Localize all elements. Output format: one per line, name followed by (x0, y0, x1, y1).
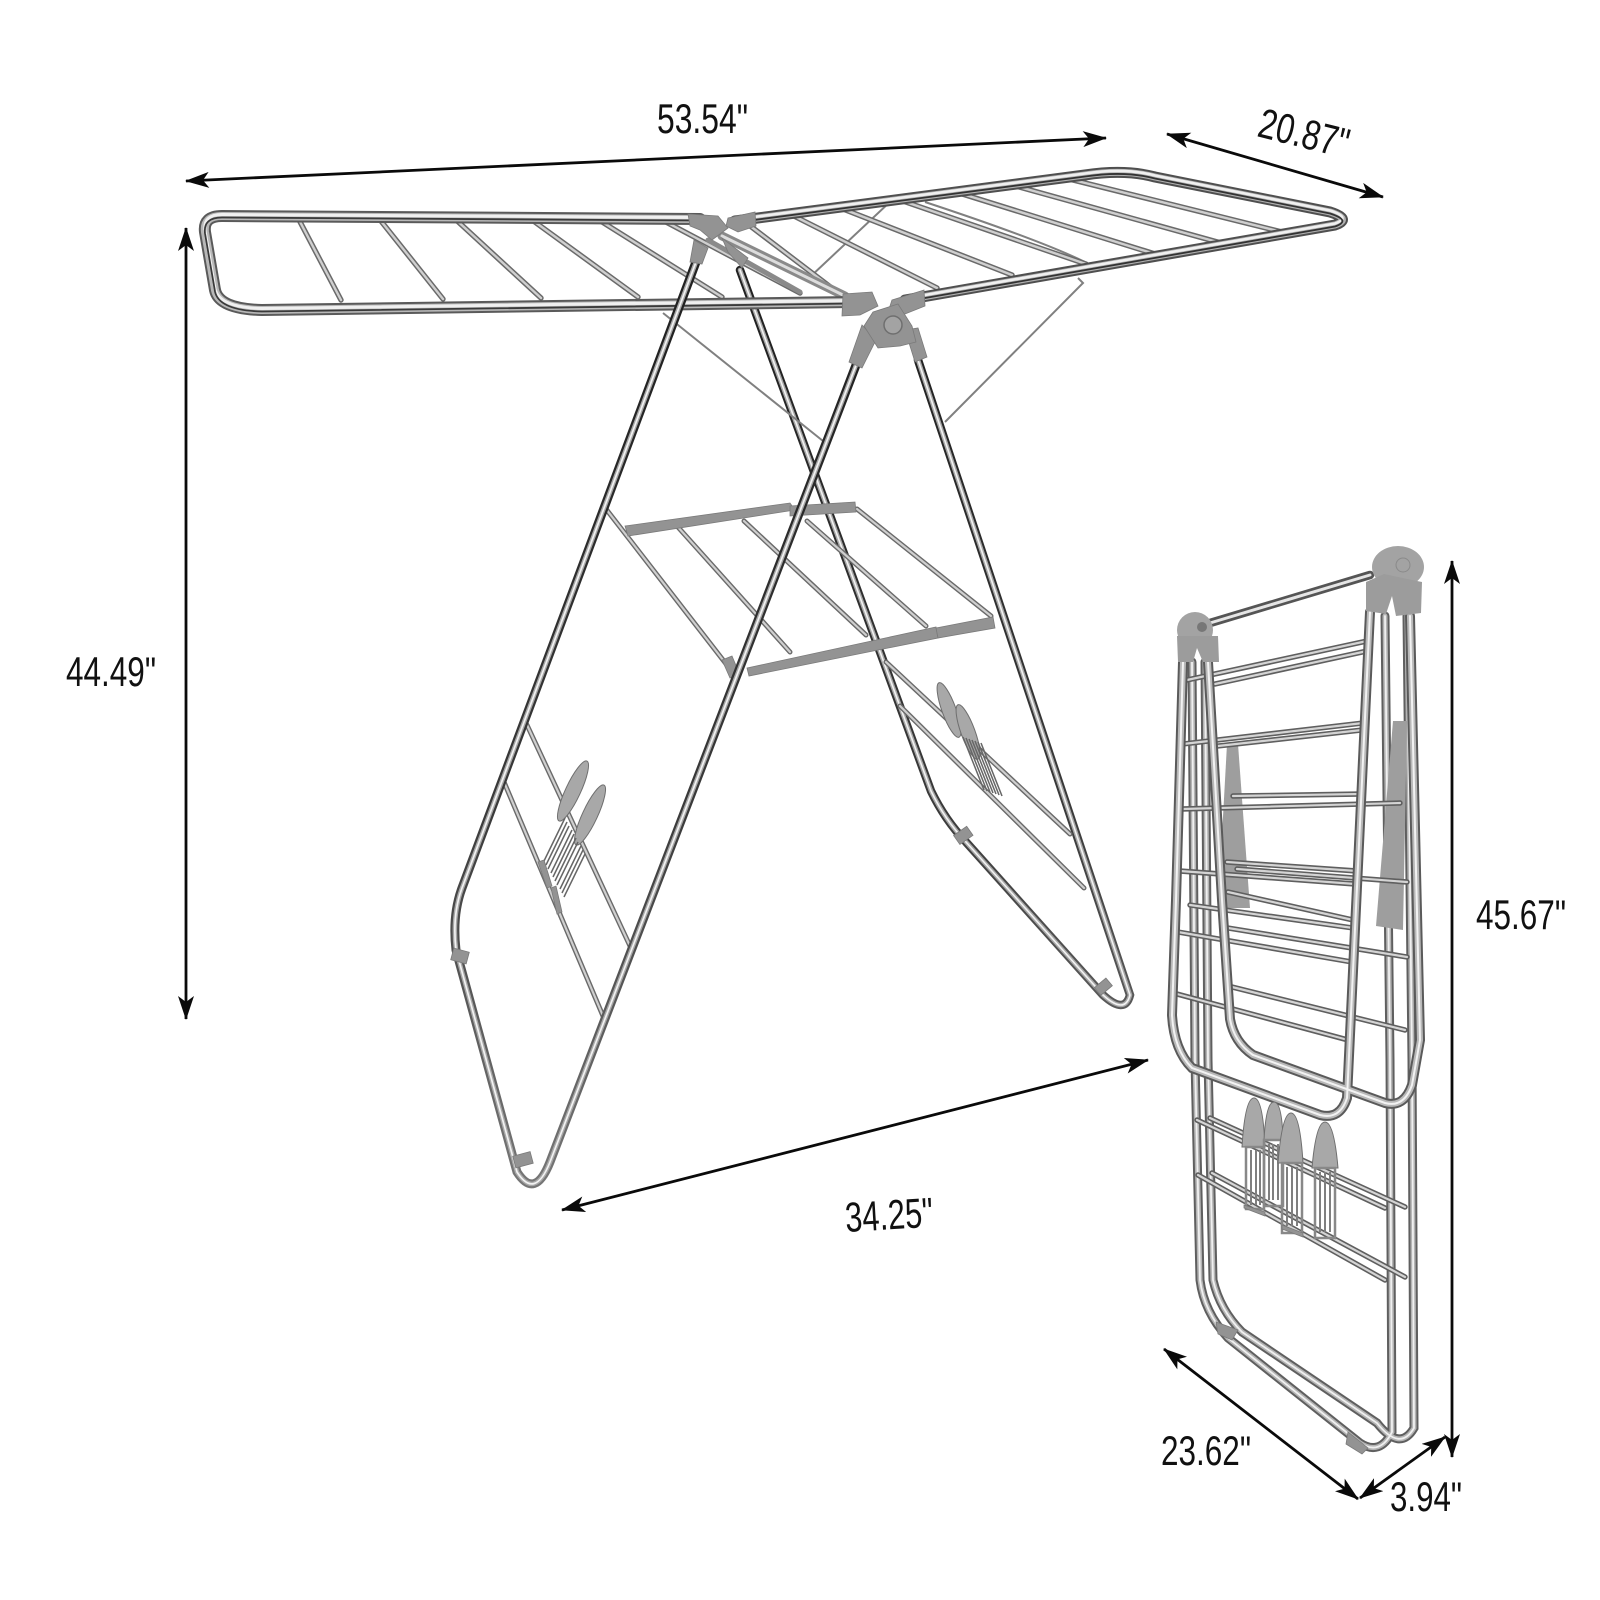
folded peg clip 1 (1242, 1098, 1265, 1216)
folded peg clip 2 (1264, 1102, 1283, 1206)
dimension: wing depth: 20.87" (1254, 99, 1354, 167)
wing and shelf rods (297, 178, 1282, 1016)
peg clips, right (933, 680, 1002, 796)
right A-frame leg (740, 270, 1130, 1005)
frame couplers (451, 826, 1112, 1168)
top connecting rod (1200, 575, 1370, 626)
illustration: folded drying rack (1172, 546, 1424, 1454)
left wing frame (205, 214, 852, 312)
folded shelf panels (1218, 721, 1407, 930)
illustration: open drying rack (205, 171, 1342, 1184)
folded foot couplers (1216, 1322, 1368, 1454)
dimension: open height: 44.49" (66, 648, 156, 695)
dimension: base width: 34.25" (844, 1189, 934, 1241)
folded rods (1177, 641, 1407, 1280)
dimension: folded height: 45.67" (1476, 891, 1566, 938)
folded front frames (1172, 612, 1420, 1116)
folded peg clip 3 (1278, 1113, 1303, 1237)
dimension: folded width (1161, 1349, 1358, 1499)
peg clips, left (538, 758, 611, 914)
folded top-left hub (1177, 612, 1219, 662)
middle shelf bars (625, 502, 995, 678)
dimension: base width (562, 1060, 1148, 1241)
dimension: wing depth (1167, 99, 1383, 197)
centre folding rods (708, 236, 845, 296)
main front and back leg frame (455, 262, 858, 1184)
front hub with pivot disc (842, 290, 927, 368)
dimension: folded depth: 3.94" (1390, 1473, 1462, 1520)
long outer frames (1192, 616, 1414, 1448)
dimension: overall width (186, 95, 1106, 181)
back hub (688, 212, 756, 268)
support wires (663, 200, 1085, 441)
dimension: overall width: 53.54" (657, 95, 748, 142)
dimension: folded width: 23.62" (1161, 1427, 1251, 1474)
right wing frame (735, 171, 1342, 302)
dimension: folded depth (1360, 1437, 1462, 1520)
folded peg clip 4 (1312, 1122, 1338, 1238)
folded top-right hub (1366, 546, 1424, 616)
